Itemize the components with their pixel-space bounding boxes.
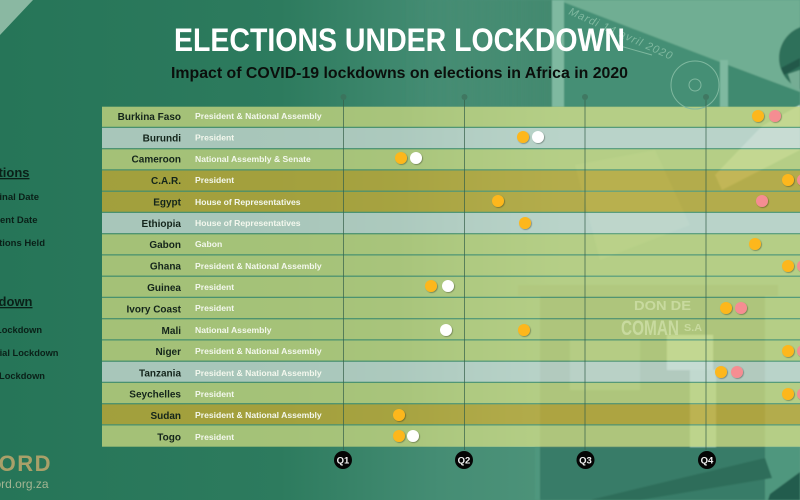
election types: House of Representatives <box>195 197 301 207</box>
elections held markers <box>407 131 544 442</box>
election types: President & National Assembly <box>195 111 322 121</box>
photo lettering: chalkboard: Mardi 14 avril 2020 <box>567 6 675 63</box>
election types: President <box>195 389 234 399</box>
election types: President <box>195 432 234 442</box>
election types: President & National Assembly <box>195 410 322 420</box>
election types: President & National Assembly <box>195 346 322 356</box>
election types: President <box>195 132 234 142</box>
quarter labels: Q2 <box>458 456 470 466</box>
election types: President & National Assembly <box>195 368 322 378</box>
country labels: Ghana <box>150 262 181 272</box>
country labels: Burkina Faso <box>118 112 181 123</box>
country labels: Sudan <box>150 411 181 422</box>
photo lettering: chalkboard <box>567 6 719 109</box>
original date markers <box>393 110 794 442</box>
election types: National Assembly <box>195 325 272 335</box>
photo lettering: ballot box <box>621 298 702 340</box>
country labels: Ivory Coast <box>127 304 182 316</box>
title: ELECTIONS UNDER LOCKDOWN <box>174 22 625 58</box>
election types: President & National Assembly <box>195 261 322 271</box>
election types: House of Representatives <box>195 218 301 228</box>
country labels: Guinea <box>147 283 181 294</box>
legend: elections <box>0 165 45 249</box>
country labels: Burundi <box>143 134 181 144</box>
country labels: C.A.R. <box>151 176 181 187</box>
country labels: Gabon <box>149 240 181 251</box>
country labels: Togo <box>157 432 181 444</box>
quarter labels: Q3 <box>579 456 592 466</box>
legend: lockdown <box>0 294 59 381</box>
logo <box>0 451 52 491</box>
country labels: Mali <box>162 326 181 337</box>
subtitle: Impact of COVID-19 lockdowns on elections in Africa in 2020 <box>171 65 628 82</box>
country labels: Cameroon <box>132 154 181 166</box>
election types: Gabon <box>195 239 222 249</box>
country labels: Seychelles <box>129 390 181 400</box>
country labels: Ethiopia <box>142 219 181 230</box>
quarter labels <box>334 451 716 469</box>
election types: President <box>195 175 234 185</box>
country labels: Egypt <box>153 198 182 208</box>
current date markers <box>731 110 800 400</box>
photo lettering: ballot box: COMAN <box>621 317 679 340</box>
photo lettering: ballot box: DON DE <box>634 298 691 313</box>
election types: President <box>195 282 234 292</box>
quarter labels: Q1 <box>337 456 350 466</box>
photo lettering: ballot box: S.A <box>684 322 702 334</box>
country labels: Niger <box>155 347 181 358</box>
country labels <box>118 112 182 444</box>
quarter gridlines <box>340 94 709 450</box>
election types: President <box>195 303 234 313</box>
election types: National Assembly & Senate <box>195 154 311 164</box>
country labels: Tanzania <box>139 368 181 380</box>
table rows <box>102 107 800 447</box>
quarter labels: Q4 <box>701 456 714 466</box>
election types <box>195 111 322 442</box>
